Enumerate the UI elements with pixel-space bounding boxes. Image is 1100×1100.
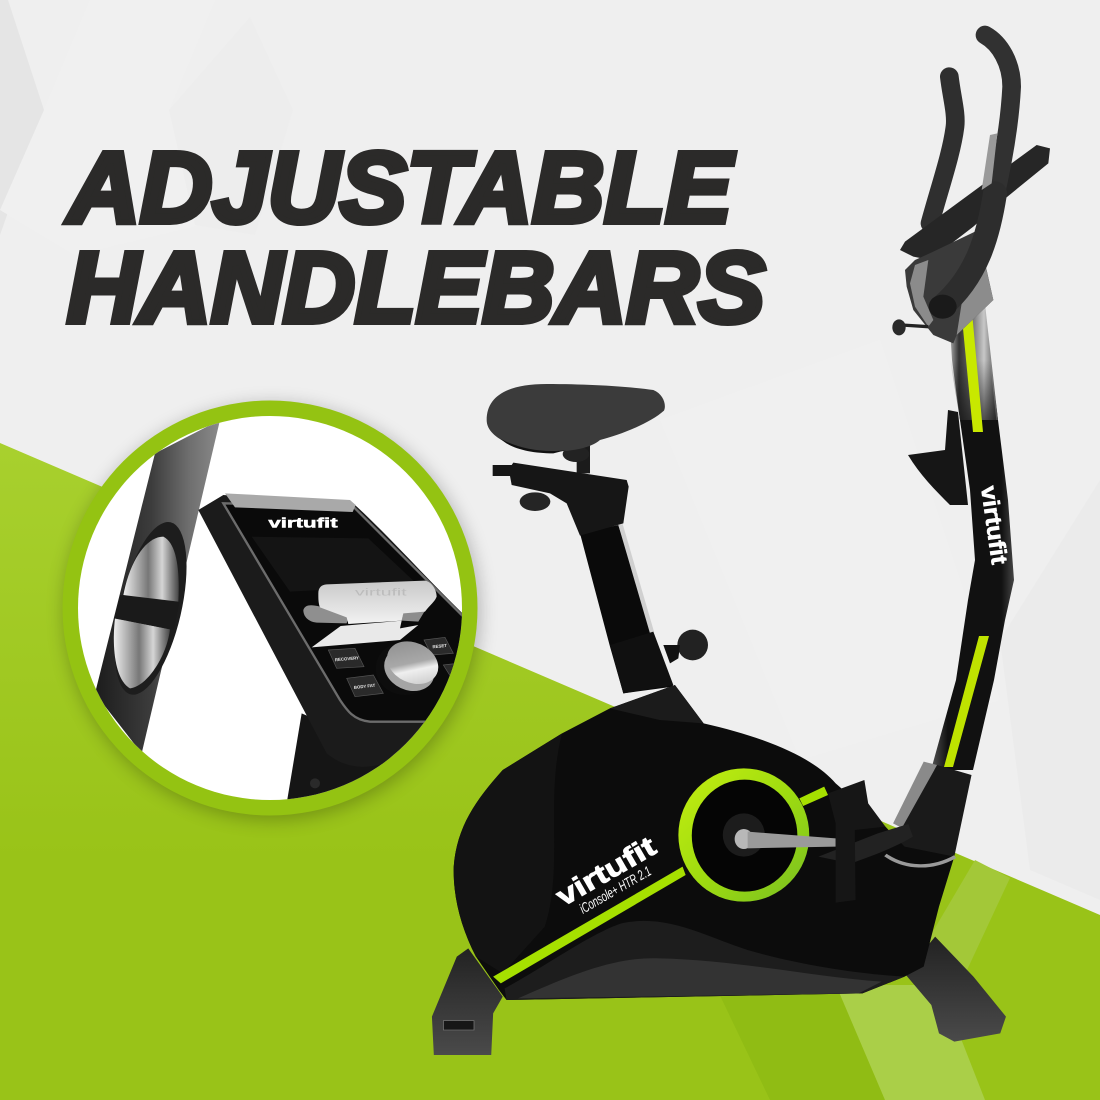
inset: silver clip: virtufit xyxy=(355,587,407,598)
inset: console body xyxy=(198,493,480,767)
bike: handlebars and head xyxy=(892,35,1050,343)
bike: lower housing xyxy=(505,921,905,1000)
bike: housing body xyxy=(454,685,954,1000)
bike: pedal and strap xyxy=(818,780,913,903)
bike: left shell panel xyxy=(454,733,562,973)
bike: grey collar trim xyxy=(885,855,955,866)
inset: console body: virtufit xyxy=(268,514,338,530)
title: ADJUSTABLE HANDLEBARS xyxy=(65,132,765,344)
inset: silver clip xyxy=(303,581,437,647)
inset: console buttons and dial: RECOVERY xyxy=(335,655,359,662)
bike: crank arm xyxy=(748,832,836,848)
bike: bottle holder xyxy=(908,410,968,505)
bike: seat post and saddle xyxy=(487,384,708,693)
bike: right foot xyxy=(905,937,1006,1042)
inset: console buttons and dial xyxy=(328,633,467,699)
bike: seat boss xyxy=(610,685,704,723)
title: ADJUSTABLE HANDLEBARS: HANDLEBARS xyxy=(67,232,765,344)
circular inset: console close-up xyxy=(62,400,480,820)
inset: console stand xyxy=(287,713,393,803)
inset: handlebar pole xyxy=(95,420,220,753)
bike: flywheel ring xyxy=(678,768,809,902)
bike: green stripe xyxy=(493,867,686,983)
inset: stand socket xyxy=(310,778,320,788)
bike: collar post xyxy=(882,762,972,857)
title: ADJUSTABLE HANDLEBARS: ADJUSTABLE xyxy=(65,132,735,244)
bike: main housing, stripes and pedal xyxy=(432,685,1006,1055)
inset: console buttons and dial: BODY FAT xyxy=(354,683,376,690)
bike: housing logo: virtufit xyxy=(550,830,661,912)
bike: left foot xyxy=(432,948,503,1055)
inset: console buttons and dial: RESET xyxy=(432,643,447,649)
bike: mast xyxy=(931,295,1014,770)
exercise bike xyxy=(432,35,1050,1055)
bike: housing logo: iConsole+ HTR 2.1 xyxy=(576,863,654,917)
background: green diagonal panel xyxy=(0,443,1100,1100)
bike: mast logo: virtufit xyxy=(976,484,1013,566)
bike: housing logo xyxy=(550,830,661,917)
